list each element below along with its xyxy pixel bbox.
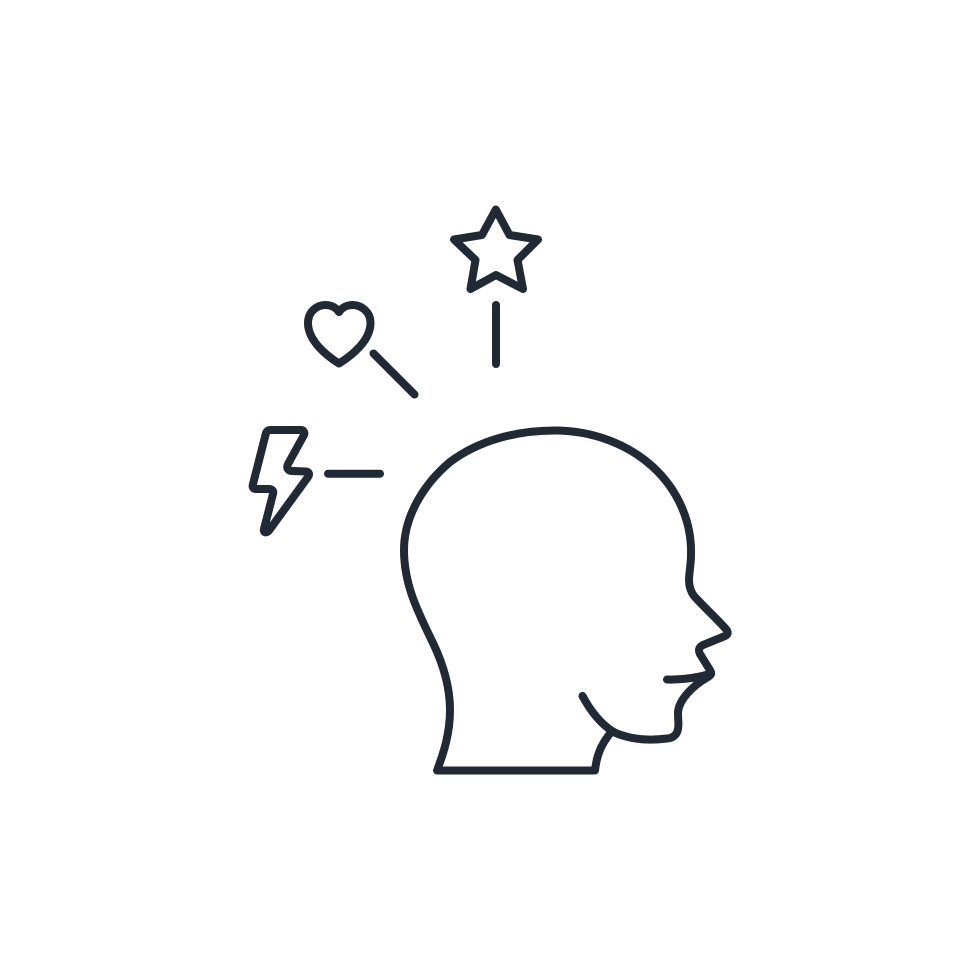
icon: lightning bolt: [253, 430, 309, 532]
jaw line: [582, 696, 612, 731]
icon: head profile: [404, 430, 728, 770]
arrow: bolt line: [328, 470, 380, 478]
mouth line: [667, 674, 710, 680]
icon: star: [454, 210, 538, 289]
arrow: star line: [492, 305, 500, 364]
icon: heart: [308, 305, 370, 364]
arrow: heart line: [374, 354, 414, 394]
